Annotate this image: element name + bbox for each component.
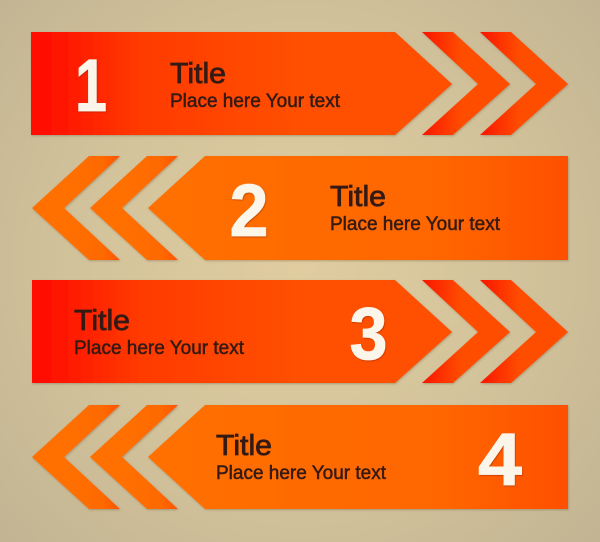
- chevron 2b: [90, 156, 178, 260]
- title 4: Title: [216, 430, 272, 462]
- number 1: 1: [75, 44, 107, 127]
- number 3: 3: [350, 292, 388, 375]
- panel: step 4: [32, 405, 568, 509]
- panel: step 2: [32, 156, 568, 260]
- chevron 3b: [480, 280, 568, 383]
- chevron 2a: [32, 156, 120, 260]
- text 1: Place here Your text: [170, 91, 341, 112]
- banner 3: [32, 280, 452, 383]
- banner 4: [148, 405, 568, 509]
- text 2: Place here Your text: [330, 214, 501, 235]
- chevron 4b: [90, 405, 178, 509]
- chevron 4a: [32, 405, 120, 509]
- text 3: Place here Your text: [74, 338, 245, 359]
- panel: step 3: [32, 280, 568, 383]
- banner 2: [148, 156, 568, 260]
- text 4: Place here Your text: [216, 463, 387, 484]
- title 3: Title: [74, 305, 130, 337]
- number 4: 4: [478, 418, 522, 501]
- number 2: 2: [230, 169, 268, 252]
- title 2: Title: [330, 181, 386, 213]
- chevron 1a: [422, 32, 510, 135]
- panel: step 1: [31, 32, 568, 135]
- title 1: Title: [170, 58, 226, 90]
- chevron 3a: [422, 280, 510, 383]
- banner 1: [31, 32, 452, 135]
- chevron 1b: [480, 32, 568, 135]
